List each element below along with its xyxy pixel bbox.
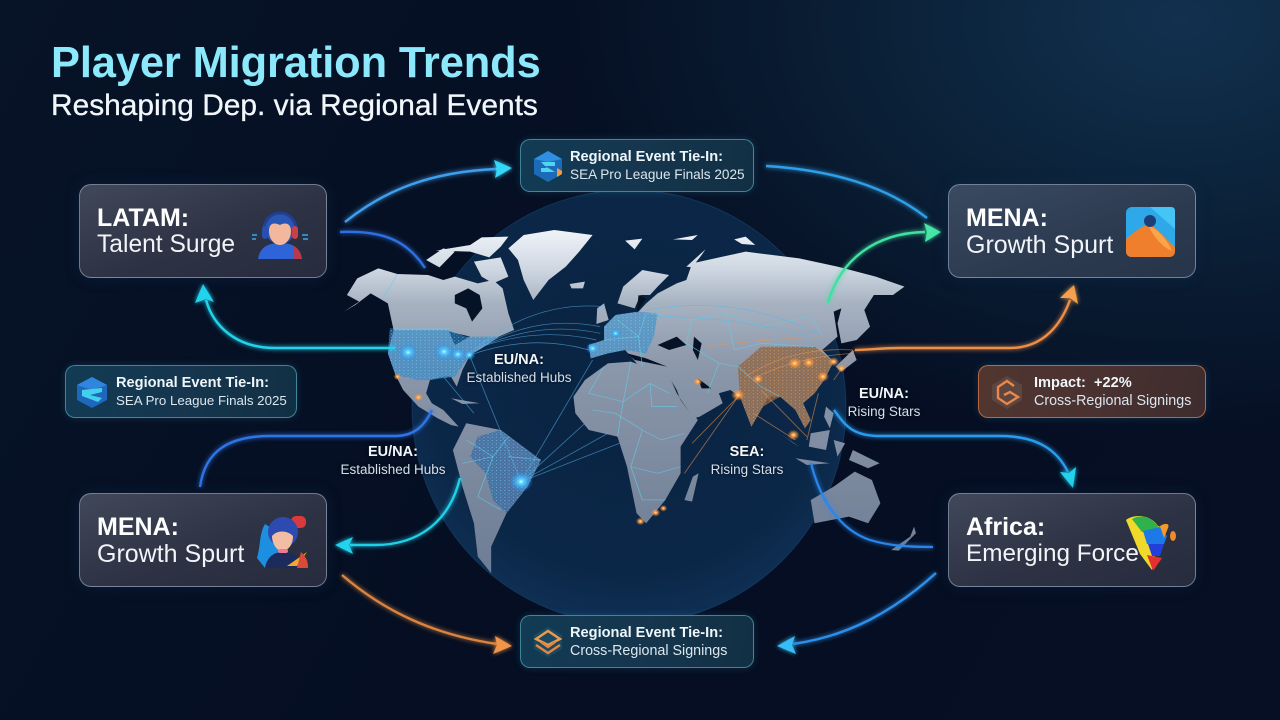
migration flow lines — [443, 305, 855, 482]
icon: hex swirl — [992, 376, 1022, 409]
MENA heading: MENA: — [97, 513, 179, 541]
arrow: map to lower left MENA — [335, 478, 460, 554]
globe — [412, 190, 846, 624]
icon: orange layered hex — [534, 627, 562, 657]
pill heading: Regional Event Tie-In: — [570, 149, 723, 165]
pill text: Cross-Regional Signings — [570, 643, 727, 659]
icon: multicolour Africa shape — [1126, 516, 1176, 570]
pill heading: Regional Event Tie-In: — [116, 375, 269, 391]
LATAM heading: LATAM: — [97, 204, 189, 232]
icon: desert tile — [1126, 207, 1175, 257]
regional land tints — [340, 180, 940, 580]
icon: player avatar — [257, 516, 308, 568]
world map landmasses — [340, 180, 940, 580]
arrow: map to LATAM — [195, 284, 395, 348]
map label: SEA rising stars — [710, 444, 784, 478]
icon: event cube — [77, 377, 107, 408]
country borders — [382, 274, 822, 510]
pill text: SEA Pro League Finals 2025 — [116, 393, 287, 408]
MENA text: Growth Spurt — [97, 540, 244, 568]
arrow: LATAM to top event pill — [345, 160, 512, 222]
panel: Africa card — [948, 493, 1196, 587]
callout: top event pill — [520, 139, 754, 192]
map label: SEA rising stars: SEA: — [730, 444, 764, 460]
pill text: SEA Pro League Finals 2025 — [570, 167, 745, 182]
arrow: top pill to right MENA — [766, 166, 927, 218]
arrow: green to right MENA — [828, 223, 941, 303]
subtitle: Reshaping Dep. via Regional Events — [51, 89, 538, 122]
arrow: blue lower left curve — [200, 410, 432, 487]
map label: EU/NA established hubs centre: EU/NA: — [494, 352, 544, 368]
panel: LATAM card — [79, 184, 327, 278]
arrow: LATAM inner blue curve — [340, 232, 425, 268]
map label: EU/NA established hubs left — [340, 444, 446, 477]
MENA heading: MENA: — [966, 204, 1048, 232]
map label: EU/NA established hubs left: Established Hubs — [340, 462, 446, 477]
city glows — [394, 329, 846, 525]
callout: left event pill — [65, 365, 297, 418]
callout: impact pill — [978, 365, 1206, 418]
map label: EU/NA established hubs centre: Established Hubs — [466, 370, 572, 385]
city-light dot fields — [388, 312, 832, 513]
world map scene with globe, land and migration arrows — [86, 158, 1081, 656]
map label: EU/NA rising stars: EU/NA: — [859, 386, 909, 402]
Africa text: Emerging Force — [966, 540, 1139, 567]
panel: top-right MENA card — [948, 184, 1196, 278]
pill heading: Impact: +22% — [1034, 375, 1132, 391]
MENA text: Growth Spurt — [966, 231, 1113, 259]
icon: player with headset — [252, 212, 308, 259]
pill heading: Regional Event Tie-In: — [570, 625, 723, 641]
LATAM text: Talent Surge — [97, 231, 235, 258]
arrow: lower left MENA to bottom pill — [342, 575, 512, 654]
icon: event cube — [534, 151, 562, 182]
map label: EU/NA established hubs left: EU/NA: — [368, 444, 418, 460]
map label: EU/NA rising stars: Rising Stars — [848, 404, 920, 419]
title: Player Migration Trends — [51, 39, 541, 87]
panel: lower-left MENA card — [79, 493, 327, 587]
arrow: blue to Africa — [834, 410, 1076, 488]
pill text: Cross-Regional Signings — [1034, 393, 1191, 409]
inland waters — [449, 288, 711, 413]
arrow: Africa to bottom pill — [777, 573, 936, 654]
Africa heading: Africa: — [966, 513, 1045, 541]
map label: SEA rising stars: Rising Stars — [711, 462, 783, 477]
map label: EU/NA established hubs centre — [466, 352, 572, 385]
callout: bottom event pill — [520, 615, 754, 668]
map label: EU/NA rising stars — [848, 228, 1170, 419]
arrow: orange to right MENA — [855, 285, 1078, 350]
arrow: blue arc to Africa card — [811, 463, 933, 547]
